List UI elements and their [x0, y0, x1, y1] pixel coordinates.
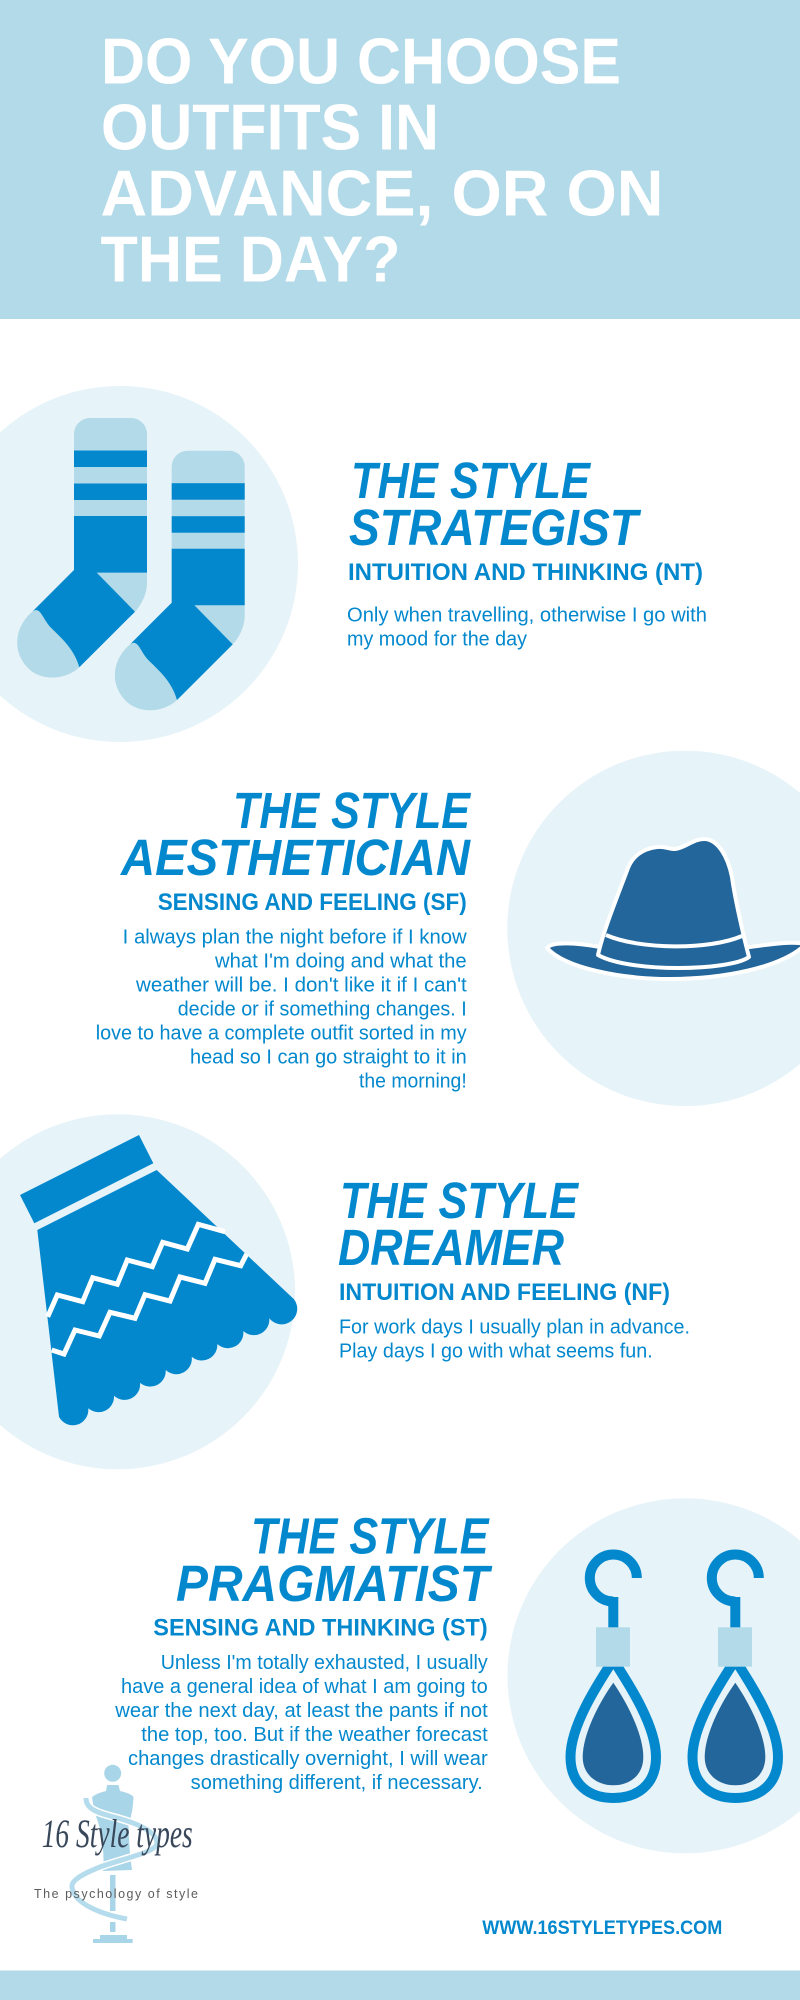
text block: pragmatist answer: something different, if necessary.: [191, 1772, 483, 1794]
panel: the style strategist: [0, 386, 707, 742]
text block: aesthetician answer: weather will be. I don't like it if I can't: [135, 974, 467, 996]
text block: pragmatist answer: wear the next day, at least the pants if not: [114, 1700, 488, 1722]
text block: dreamer answer: Play days I go with what seems fun.: [339, 1340, 653, 1362]
icon: hat in circle: [507, 751, 800, 1106]
title: THE DAY?: [100, 222, 400, 296]
website url: WWW.16STYLETYPES.COM: [482, 1918, 722, 1939]
text block: dreamer answer: [339, 1316, 690, 1362]
title: DO YOU CHOOSE: [101, 24, 621, 98]
heading: the style strategist: THE STYLE: [351, 452, 592, 509]
heading: the style pragmatist: PRAGMATIST: [176, 1555, 493, 1612]
text block: pragmatist answer: [114, 1652, 488, 1794]
text block: aesthetician answer: decide or if something changes. I: [178, 998, 467, 1020]
logo: 16 style types: [34, 1765, 198, 1943]
title: [100, 24, 664, 296]
heading: the style dreamer: THE STYLE: [340, 1172, 580, 1229]
panel: the style pragmatist: [114, 1498, 800, 1853]
heading: the style aesthetician: THE STYLE: [233, 782, 472, 839]
logo tagline: The psychology of style: [34, 1887, 198, 1901]
text block: aesthetician answer: [96, 926, 467, 1092]
text block: strategist answer: my mood for the day: [347, 629, 527, 651]
title: OUTFITS IN: [101, 90, 439, 164]
header banner: [0, 0, 800, 319]
heading: the style dreamer: [338, 1172, 580, 1276]
icon: dress form mannequin: [72, 1765, 157, 1943]
logo wordmark: 16 Style types: [42, 1811, 193, 1856]
footer band: [0, 1970, 800, 2000]
text block: aesthetician answer: the morning!: [359, 1070, 467, 1092]
subheading: sensing and feeling: SENSING AND FEELING (SF): [158, 889, 467, 916]
heading: the style aesthetician: [119, 782, 472, 886]
subheading: sensing and thinking: SENSING AND THINKING (ST): [153, 1615, 488, 1642]
text block: strategist answer: Only when travelling, otherwise I go with: [347, 605, 707, 627]
heading: the style strategist: [349, 452, 641, 556]
title: ADVANCE, OR ON: [100, 156, 664, 230]
heading: the style aesthetician: AESTHETICIAN: [119, 829, 471, 886]
text block: aesthetician answer: head so I can go straight to it in: [190, 1046, 467, 1068]
text block: aesthetician answer: what I'm doing and what the: [214, 950, 467, 972]
text block: pragmatist answer: Unless I'm totally exhausted, I usually: [161, 1652, 488, 1674]
icon: socks in circle: [0, 386, 298, 742]
text block: pragmatist answer: changes drastically overnight, I will wear: [128, 1748, 488, 1770]
subheading: intuition and feeling: INTUITION AND FEELING (NF): [339, 1279, 670, 1306]
text block: pragmatist answer: have a general idea of what I am going to: [121, 1676, 488, 1698]
heading: the style pragmatist: [176, 1508, 493, 1612]
heading: the style dreamer: DREAMER: [338, 1219, 564, 1276]
text block: strategist answer: [347, 605, 707, 651]
text block: dreamer answer: For work days I usually plan in advance.: [339, 1316, 690, 1338]
icon: earrings in circle: [508, 1498, 800, 1853]
icon: skirt in circle: [0, 1114, 297, 1469]
text block: pragmatist answer: the top, too. But if the weather forecast: [141, 1724, 488, 1746]
panel: the style aesthetician: [96, 751, 800, 1106]
panel: the style dreamer: [0, 1114, 690, 1469]
heading: the style strategist: STRATEGIST: [349, 499, 641, 556]
text block: aesthetician answer: I always plan the night before if I know: [123, 926, 467, 948]
text block: aesthetician answer: love to have a complete outfit sorted in my: [96, 1022, 467, 1044]
subheading: intuition and thinking: INTUITION AND THINKING (NT): [348, 559, 703, 586]
heading: the style pragmatist: THE STYLE: [251, 1508, 490, 1564]
